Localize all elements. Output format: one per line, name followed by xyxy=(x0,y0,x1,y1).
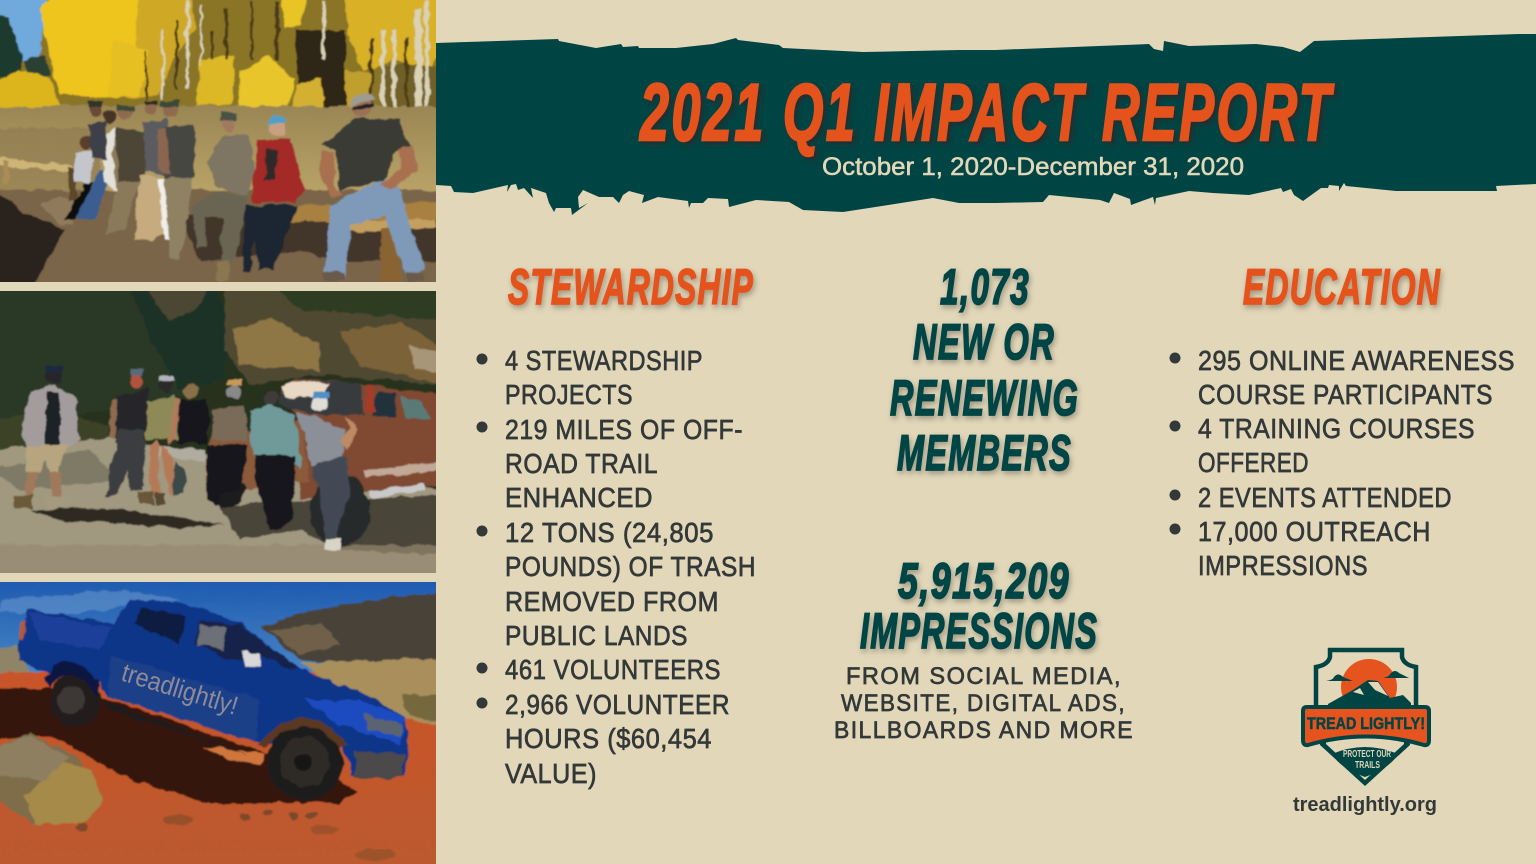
stat: new or renewing members: RENEWING xyxy=(890,370,1079,426)
list: stewardship stats: VALUE) xyxy=(505,758,597,789)
list: stewardship stats: 461 VOLUNTEERS xyxy=(505,654,721,685)
list: stewardship stats: HOURS ($60,454 xyxy=(505,723,712,754)
subtitle: date range: October 1, 2020-December 31, 2020 xyxy=(822,153,1244,181)
list: education stats: 4 TRAINING COURSES xyxy=(1198,413,1475,444)
photo: volunteers seated on a fence before aspen trees xyxy=(0,0,446,292)
photo: blue Tread Lightly pickup on red rock trail: treadlightly! xyxy=(118,657,242,721)
list: stewardship stats: 219 MILES OF OFF- xyxy=(505,414,743,445)
logo: Tread Lightly shield: PROTECT OUR xyxy=(1343,749,1392,760)
text block: impression sources xyxy=(834,663,1134,744)
list: stewardship stats: 2,966 VOLUNTEER xyxy=(505,689,730,720)
stat: impressions: 5,915,209 xyxy=(898,553,1070,609)
list: education stats: 2 EVENTS ATTENDED xyxy=(1198,482,1452,513)
text block: impression sources: FROM SOCIAL MEDIA, xyxy=(846,663,1122,690)
header banner: torn teal brush stroke xyxy=(436,34,1536,215)
list: stewardship stats: 12 TONS (24,805 xyxy=(505,517,714,548)
text block: impression sources: WEBSITE, DIGITAL ADS, xyxy=(841,690,1126,717)
heading: stewardship: STEWARDSHIP xyxy=(508,259,754,315)
list: education stats: 17,000 OUTREACH xyxy=(1198,516,1431,547)
list: stewardship stats: ENHANCED xyxy=(505,482,653,513)
list: education stats: IMPRESSIONS xyxy=(1198,550,1368,581)
list: education stats: OFFERED xyxy=(1198,447,1309,478)
logo: Tread Lightly shield: TREAD LIGHTLY! xyxy=(1307,714,1425,733)
list: stewardship stats: PROJECTS xyxy=(505,379,633,410)
photo: blue Tread Lightly pickup on red rock trail xyxy=(0,572,446,864)
list: stewardship stats: PUBLIC LANDS xyxy=(505,620,688,651)
list: stewardship stats: POUNDS) OF TRASH xyxy=(505,551,756,582)
stat: impressions xyxy=(860,553,1098,659)
stat: new or renewing members: NEW OR xyxy=(913,314,1055,370)
stat: new or renewing members: 1,073 xyxy=(940,259,1030,315)
stat: new or renewing members xyxy=(890,259,1079,481)
list: stewardship stats xyxy=(476,345,756,789)
list: education stats xyxy=(1170,345,1515,581)
logo: Tread Lightly shield: TRAILS xyxy=(1355,760,1380,771)
website url: treadlightly.org xyxy=(1293,794,1437,816)
photo: masked volunteers beside a pickup truck xyxy=(0,281,446,583)
stat: new or renewing members: MEMBERS xyxy=(897,425,1072,481)
logo: Tread Lightly shield xyxy=(1303,650,1429,786)
list: stewardship stats: REMOVED FROM xyxy=(505,586,719,617)
stat: impressions: IMPRESSIONS xyxy=(860,603,1098,659)
list: stewardship stats: ROAD TRAIL xyxy=(505,448,658,479)
list: education stats: COURSE PARTICIPANTS xyxy=(1198,379,1493,410)
list: stewardship stats: 4 STEWARDSHIP xyxy=(505,345,703,376)
text block: impression sources: BILLBOARDS AND MORE xyxy=(834,717,1134,744)
